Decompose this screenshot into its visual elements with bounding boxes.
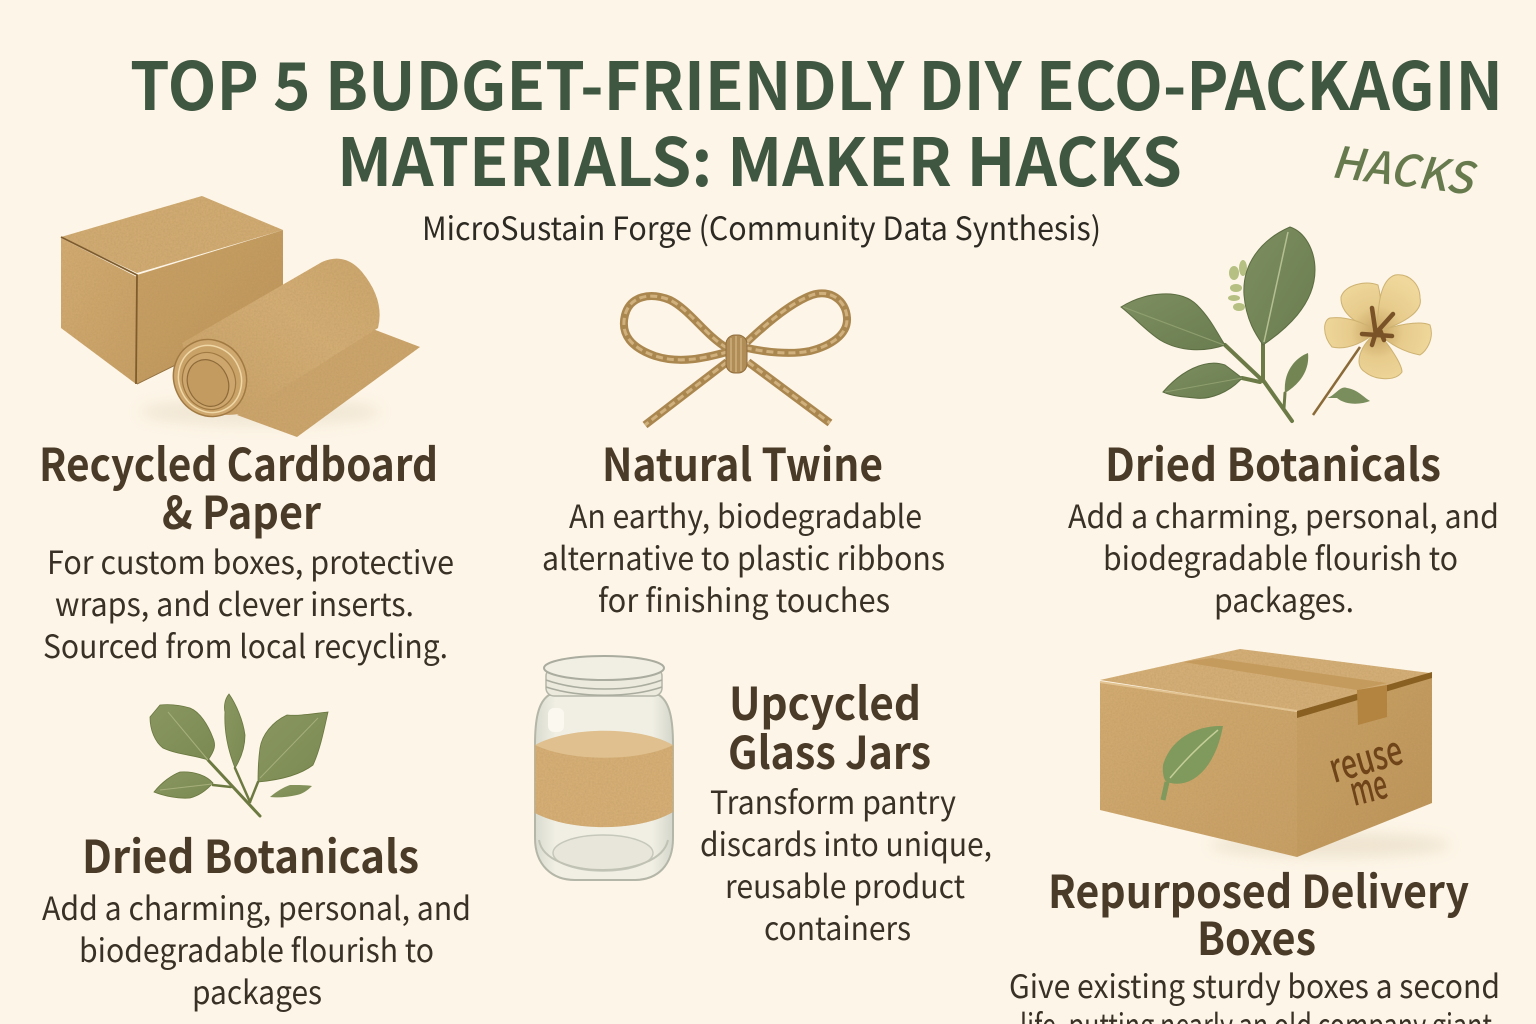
description: natural twine: An earthy, biodegradable bbox=[569, 492, 922, 538]
description: upcycled glass jars: reusable product bbox=[725, 862, 965, 908]
stamped text: reuse me bbox=[1321, 718, 1408, 818]
description: dried botanicals: packages bbox=[192, 968, 322, 1014]
stamped text: reuse me: reuse bbox=[1321, 718, 1408, 795]
heading: recycled cardboard: & Paper bbox=[162, 477, 321, 542]
description: dried botanicals: Add a charming, personal, and bbox=[42, 884, 471, 930]
description: recycled cardboard bbox=[43, 538, 454, 668]
description: dried botanicals bbox=[1068, 492, 1499, 622]
description: upcycled glass jars: discards into unique, bbox=[700, 820, 992, 866]
panel: recycled cardboard and paper bbox=[39, 196, 454, 668]
panel: dried botanicals, lower left bbox=[42, 694, 471, 1014]
panel: dried botanicals, top right bbox=[1068, 227, 1499, 622]
description: recycled cardboard: For custom boxes, protective bbox=[47, 538, 454, 584]
subtitle: MicroSustain Forge (Community Data Synthesis) bbox=[422, 204, 1101, 250]
description: dried botanicals: packages. bbox=[1214, 576, 1354, 622]
description: natural twine: alternative to plastic ribbons bbox=[542, 534, 945, 580]
icon: green leaves sprig bbox=[150, 694, 328, 816]
title bbox=[130, 34, 1503, 206]
description: natural twine bbox=[542, 492, 945, 622]
stamped text: reuse me: me bbox=[1343, 752, 1393, 818]
handwritten note: HACKS: HACKS bbox=[1326, 127, 1488, 207]
description: repurposed delivery boxes: Give existing sturdy boxes a second bbox=[1009, 962, 1500, 1008]
heading: natural twine: Natural Twine bbox=[602, 429, 883, 494]
icon: glass jar with kraft band bbox=[535, 656, 673, 880]
description: upcycled glass jars bbox=[700, 778, 992, 950]
title: TOP 5 BUDGET-FRIENDLY DIY ECO-PACKAGIN bbox=[130, 34, 1503, 130]
heading: upcycled glass jars bbox=[728, 668, 931, 782]
heading: dried botanicals: Dried Botanicals bbox=[82, 821, 419, 886]
heading: repurposed delivery boxes bbox=[1048, 856, 1469, 968]
icon: cardboard box and paper roll bbox=[61, 196, 420, 437]
heading: upcycled glass jars: Upcycled bbox=[729, 668, 921, 733]
icon: twine bow bbox=[624, 293, 847, 425]
description: recycled cardboard: wraps, and clever inserts. bbox=[55, 580, 414, 626]
icon: cardboard delivery box bbox=[1100, 649, 1450, 857]
heading: repurposed delivery boxes: Boxes bbox=[1197, 903, 1316, 968]
description: natural twine: for finishing touches bbox=[598, 576, 890, 622]
description: dried botanicals bbox=[42, 884, 471, 1014]
heading: dried botanicals: Dried Botanicals bbox=[1105, 429, 1441, 494]
description: dried botanicals: Add a charming, personal, and bbox=[1068, 492, 1499, 538]
description: dried botanicals: biodegradable flourish to bbox=[79, 926, 434, 972]
heading: upcycled glass jars: Glass Jars bbox=[728, 717, 931, 782]
panel: repurposed delivery boxes bbox=[1009, 649, 1500, 1024]
heading: repurposed delivery boxes: Repurposed Delivery bbox=[1048, 856, 1469, 921]
description: recycled cardboard: Sourced from local recycling. bbox=[43, 622, 448, 668]
icon: printed leaf on the box bbox=[1163, 726, 1223, 800]
heading: recycled cardboard bbox=[39, 429, 438, 542]
description: dried botanicals: biodegradable flourish to bbox=[1103, 534, 1458, 580]
title: MATERIALS: MAKER HACKS bbox=[337, 110, 1182, 206]
heading: recycled cardboard: Recycled Cardboard bbox=[39, 429, 438, 494]
icon: pressed leaves and flower bbox=[1121, 227, 1431, 421]
description: upcycled glass jars: containers bbox=[764, 904, 911, 950]
panel: natural twine bbox=[542, 293, 945, 622]
description: upcycled glass jars: Transform pantry bbox=[710, 778, 956, 824]
panel: upcycled glass jars bbox=[535, 656, 992, 950]
